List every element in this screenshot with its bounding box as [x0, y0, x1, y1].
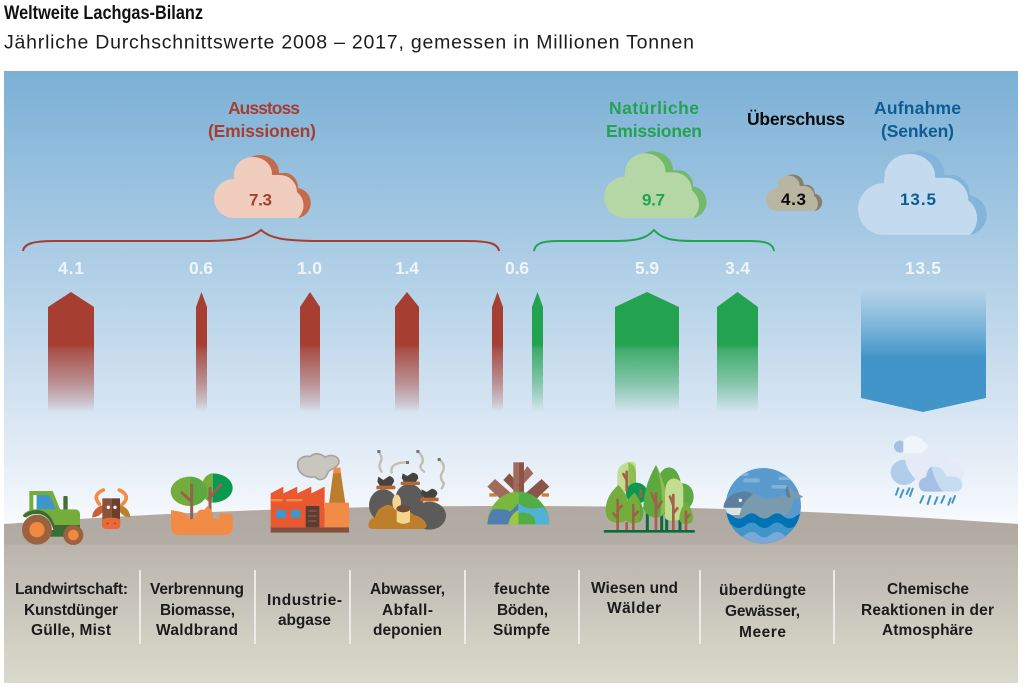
label: Wiesen und Wälder: Wiesen und [591, 580, 678, 597]
icon: burning trees [171, 473, 233, 535]
subtitle: Jährliche Durchschnittswerte 2008 – 2017, gemessen in Millionen Tonnen [4, 32, 694, 54]
values row: 3.4 [725, 258, 750, 278]
heading: Natürliche Emissionen: Emissionen [606, 121, 702, 141]
values row: 4.1 [58, 258, 84, 278]
icon: garbage bags [368, 450, 446, 530]
label: Abwasser: Abfall- [382, 602, 433, 619]
heading: Aufnahme [874, 98, 961, 141]
icon: rain clouds [891, 436, 964, 505]
cloud: Überschuss 4.3: 4.3 [781, 190, 806, 209]
arrow: Verbrennung 0.6 [196, 292, 207, 412]
label: chemische Reaktionen: Chemische [887, 581, 969, 598]
label: Verbrennung [150, 581, 244, 639]
label: Wiesen und Wälder: Wälder [607, 600, 661, 617]
values row: 1.4 [395, 258, 419, 278]
label: Industrieabgase: Industrie- [267, 592, 342, 609]
label: chemische Reaktionen: Reaktionen in der [861, 602, 994, 619]
label: Abwasser: Abwasser, [370, 581, 445, 598]
cloud: natürliche Emissionen 9.7 [604, 151, 707, 218]
label: Abwasser [370, 581, 445, 639]
values row [58, 258, 941, 278]
heading: Ausstoss [208, 98, 316, 141]
heading: Aufnahme: (Senken) [881, 121, 954, 141]
values row: 5.9 [635, 258, 659, 278]
label: Abwasser: deponien [373, 622, 442, 639]
label: Verbrennung: Waldbrand [156, 622, 238, 639]
label: Landwirtschaft: Gülle, Mist [31, 622, 111, 639]
cloud: Aufnahme 13.5 [858, 151, 987, 235]
arrow: feuchte Böden anthropogen 0.6 [492, 292, 503, 412]
label: feuchte Böden: Sümpfe [493, 622, 550, 639]
title: Weltweite Lachgas-Bilanz [4, 3, 203, 24]
label: feuchte Böden: Böden, [497, 602, 548, 619]
values row: 13.5 [905, 258, 941, 278]
arrow: feuchte Böden natürlich 0.6 [532, 292, 543, 412]
label: Landwirtschaft: Kunstdünger [24, 602, 118, 619]
label: überdüngte Gewässer: Gewässer, [725, 603, 800, 620]
heading: Ausstoss: Ausstoss [228, 98, 300, 118]
heading: Natürliche Emissionen [606, 98, 702, 141]
cloud: natürliche Emissionen 9.7: 9.7 [642, 190, 665, 210]
arrow: Wiesen und Wälder 5.9 [615, 292, 679, 412]
values row: 1.0 [297, 258, 322, 278]
cloud: Aufnahme 13.5: 13.5 [900, 190, 936, 209]
heading: Überschuss: Überschuss [747, 109, 845, 129]
dividers [139, 570, 835, 644]
values row: 0.6 [189, 258, 213, 278]
label: überdüngte Gewässer: überdüngte [719, 582, 806, 599]
brace: Ausstoss [23, 230, 499, 251]
label: Verbrennung: Verbrennung [150, 581, 244, 598]
heading: Ausstoss: (Emissionen) [208, 121, 316, 141]
label: Wiesen und Wälder [591, 580, 678, 617]
label: Landwirtschaft [15, 581, 128, 639]
brace: natürliche Emissionen [534, 230, 774, 251]
icon: wetland earth [487, 462, 549, 524]
label: Verbrennung: Biomasse, [160, 602, 235, 619]
cloud: Überschuss 4.3 [766, 174, 822, 211]
label: chemische Reaktionen: Atmosphäre [882, 622, 973, 639]
label: feuchte Böden: feuchte [494, 581, 550, 598]
arrow: Gewässer 3.4 [717, 292, 758, 412]
heading: Aufnahme: Aufnahme [874, 98, 961, 118]
cloud: Ausstoss 7.3: 7.3 [249, 190, 272, 210]
label: Industrieabgase: abgase [278, 612, 331, 629]
cloud: Ausstoss 7.3 [214, 155, 311, 218]
panel: sky background [4, 71, 1018, 531]
label: überdüngte Gewässer [719, 582, 806, 641]
label: Landwirtschaft: Landwirtschaft: [15, 581, 128, 598]
icon: forest [604, 462, 695, 533]
icon: cow [92, 490, 130, 529]
icon: factory [271, 454, 349, 533]
arrow: Landwirtschaft 4.1 [48, 292, 94, 412]
arrow: Industrieabgase 1.0 [300, 292, 320, 412]
label: feuchte Böden [493, 581, 550, 639]
panel: ground [4, 506, 1018, 683]
label: überdüngte Gewässer: Meere [739, 624, 786, 641]
icon: ocean globe with whale [723, 468, 804, 544]
label: Industrieabgase [267, 592, 342, 629]
arrow: Abwasser 1.4 [395, 292, 419, 412]
icon: tractor [22, 491, 83, 545]
values row: 0.6 [505, 258, 529, 278]
arrow: Senken 13.5 [861, 290, 986, 412]
label: chemische Reaktionen [861, 581, 994, 639]
heading: Natürliche Emissionen: Natürliche [609, 98, 699, 118]
